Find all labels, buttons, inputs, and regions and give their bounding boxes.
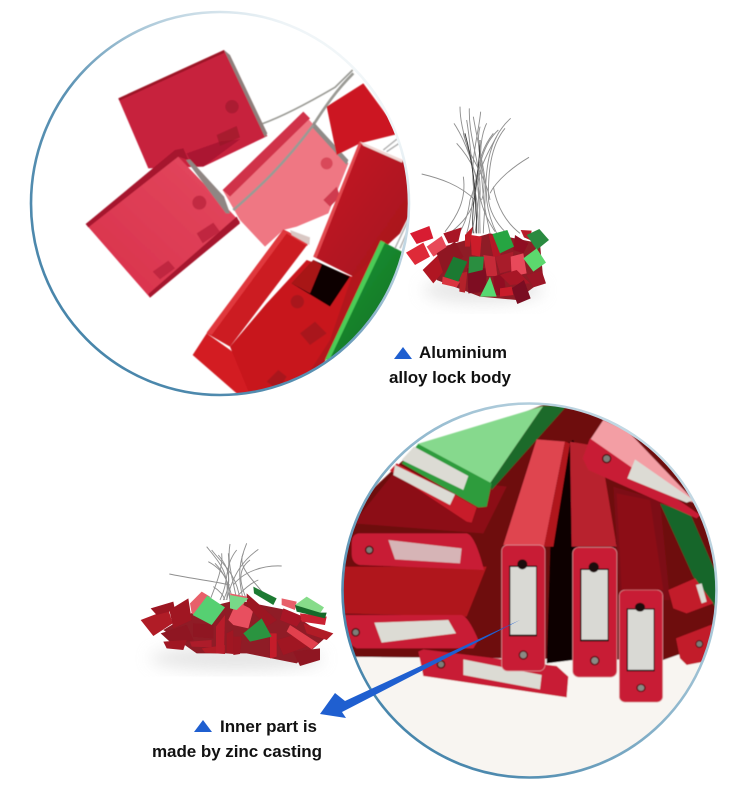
bundle wires xyxy=(169,543,282,603)
bundle wires xyxy=(422,107,529,233)
heading: Inner part is made by zinc casting xyxy=(152,717,322,761)
circle outline xyxy=(342,404,716,778)
photo: red strip beside the green body xyxy=(309,234,400,371)
photo: pale pink card xyxy=(223,112,348,247)
photo: upright dark red body xyxy=(313,142,410,277)
arrow: blue callout pointing to label xyxy=(320,620,520,718)
text: alloy lock body: alloy lock body xyxy=(389,368,512,387)
photo: dark red background mass xyxy=(340,403,720,660)
icon: blue triangle xyxy=(394,347,412,359)
green seal bodies xyxy=(193,587,327,642)
photo: bright red front-left card xyxy=(86,148,240,298)
text: Inner part is: Inner part is xyxy=(220,717,317,736)
circle outline xyxy=(31,12,409,395)
seal bodies xyxy=(141,592,333,666)
text: Aluminium: Aluminium xyxy=(419,343,507,362)
photo: vertical faces with zinc inserts xyxy=(502,545,663,702)
panel: top magnified photo of lock bodies xyxy=(31,12,412,397)
photo: floor xyxy=(356,654,701,776)
photo: red and green aluminium seal bodies xyxy=(86,50,412,397)
photo: top right red body xyxy=(327,83,400,155)
photo: third body xyxy=(617,493,663,590)
bundle shadow xyxy=(423,277,543,303)
seal bodies xyxy=(406,226,546,304)
photo: green body xyxy=(325,241,412,360)
photo: upper right red end xyxy=(583,438,700,518)
photo: wires at right edge xyxy=(382,138,407,250)
text: made by zinc casting: made by zinc casting xyxy=(152,742,322,761)
photo: right small red ends xyxy=(668,578,713,665)
icon: blue triangle xyxy=(194,720,212,732)
photo: green end cap xyxy=(402,444,492,507)
heading: Aluminium alloy lock body xyxy=(389,343,512,387)
photo: red end left lower xyxy=(345,615,478,648)
photo: front red body xyxy=(193,229,352,395)
photo: second tall body xyxy=(570,442,617,547)
photo: small bundle of seals, bottom left xyxy=(141,543,333,670)
photo: tall bright red body xyxy=(503,439,565,547)
photo: cable wires xyxy=(262,70,353,125)
photo: red end left upper xyxy=(352,533,484,570)
seal mass xyxy=(163,600,327,663)
photo: seal ends with zinc inserts xyxy=(340,403,730,780)
photo: dark green right body xyxy=(660,502,716,607)
seal mass xyxy=(437,233,543,300)
photo: small bundle of seals, top right xyxy=(406,107,549,304)
photo: light green top face xyxy=(417,406,543,483)
panel: bottom magnified photo of zinc inner parts xyxy=(340,403,730,780)
green seal bodies xyxy=(444,229,549,297)
photo: upper right pale pink face xyxy=(590,420,697,503)
photo: red end bottom tilted xyxy=(418,649,568,697)
bundle shadow xyxy=(150,647,323,670)
photo: wire over pale card xyxy=(233,125,313,210)
photo: red end under green xyxy=(390,463,477,523)
photo: dark red upper card xyxy=(118,50,267,168)
